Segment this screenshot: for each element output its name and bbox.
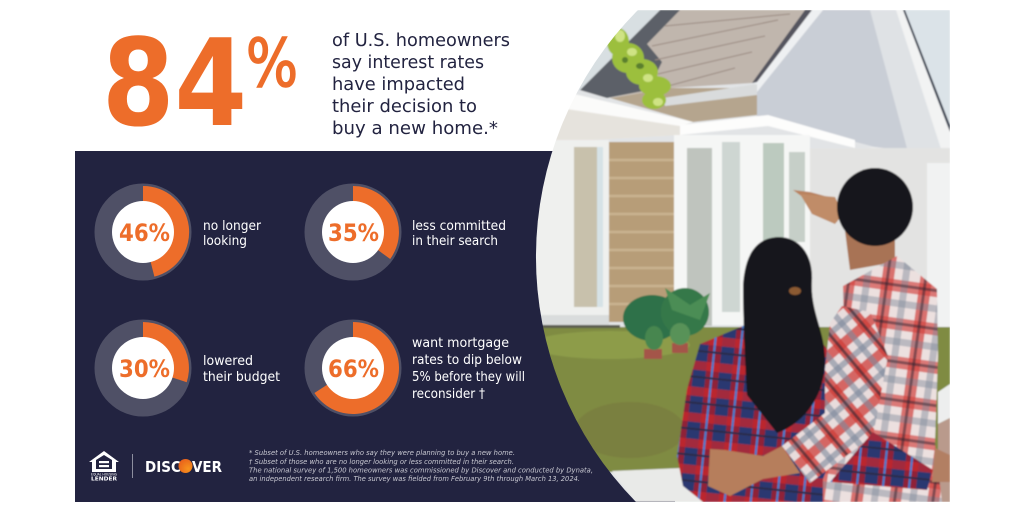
donut: 66% want lower mortgage rates: rates to dip below bbox=[412, 353, 522, 368]
donut: 35% less committed bbox=[304, 184, 506, 280]
lawn bbox=[530, 327, 950, 472]
right wall bbox=[850, 148, 950, 170]
roof bbox=[614, 10, 806, 97]
headline text: have impacted bbox=[332, 74, 465, 95]
big statistic: 84%: 84 bbox=[102, 15, 247, 154]
main gable wall bbox=[755, 10, 909, 156]
footnotes: * Subset of U.S. homeowners who say they were planning to buy a new home. bbox=[249, 449, 515, 457]
donut: 30% lowered budget bbox=[94, 320, 280, 416]
potted plants bbox=[623, 288, 710, 359]
door wall bbox=[536, 140, 609, 315]
discover logo: DISCOVER bbox=[145, 458, 222, 476]
donut: 46% no longer looking bbox=[94, 184, 262, 280]
equal housing lender logo: LENDER bbox=[91, 476, 117, 482]
headline text: of U.S. homeowners bbox=[332, 30, 510, 51]
donut: 35% less committed: less committed bbox=[412, 219, 506, 234]
donut: 66% want lower mortgage rates bbox=[304, 320, 525, 416]
soffit bbox=[610, 88, 757, 122]
donut: 30% lowered budget: lowered bbox=[203, 354, 253, 369]
porch eaves bbox=[557, 110, 679, 139]
headline text bbox=[332, 30, 510, 139]
footnotes: an independent research firm. The survey was fielded from February 9th through March 13, 2024. bbox=[249, 475, 580, 483]
donut: 66% want lower mortgage rates: reconsider † bbox=[412, 387, 485, 402]
footnotes: The national survey of 1,500 homeowners was commissioned by Discover and conducted by Dynata, bbox=[249, 466, 593, 474]
equal housing lender logo: EQUAL HOUSING bbox=[91, 472, 118, 476]
footnotes bbox=[249, 449, 593, 483]
donut: 66% want lower mortgage rates: 5% before they will bbox=[412, 370, 525, 385]
windows and columns bbox=[674, 135, 810, 325]
dark statistics panel bbox=[75, 151, 675, 502]
big statistic: 84%: % bbox=[246, 25, 298, 102]
stone wall bbox=[609, 142, 675, 322]
donut: 46% no longer looking: 46% bbox=[119, 219, 170, 247]
sky and far gable bbox=[900, 10, 950, 135]
woman bbox=[677, 237, 828, 502]
headline text: buy a new home.* bbox=[332, 118, 498, 139]
climbing foliage bbox=[607, 28, 671, 109]
photo: couple looking at a house bbox=[530, 10, 950, 502]
footnotes: † Subset of those who are no longer looking or less committed in their search. bbox=[249, 458, 514, 466]
donut: 35% less committed: 35% bbox=[328, 219, 379, 247]
man bbox=[708, 168, 950, 502]
donut: 30% lowered budget: 30% bbox=[119, 355, 170, 383]
donut: 30% lowered budget: their budget bbox=[203, 370, 280, 385]
donut: 46% no longer looking: no longer bbox=[203, 219, 262, 234]
logo divider bbox=[132, 454, 133, 478]
walkway bbox=[612, 466, 682, 474]
headline text: say interest rates bbox=[332, 52, 484, 73]
donut: 66% want lower mortgage rates: want mortgage bbox=[412, 336, 509, 351]
equal housing lender logo bbox=[89, 451, 119, 482]
headline text: their decision to bbox=[332, 96, 477, 117]
donut: 66% want lower mortgage rates: 66% bbox=[328, 355, 379, 383]
donut: 46% no longer looking: looking bbox=[203, 234, 247, 249]
donut: 35% less committed: in their search bbox=[412, 234, 498, 249]
